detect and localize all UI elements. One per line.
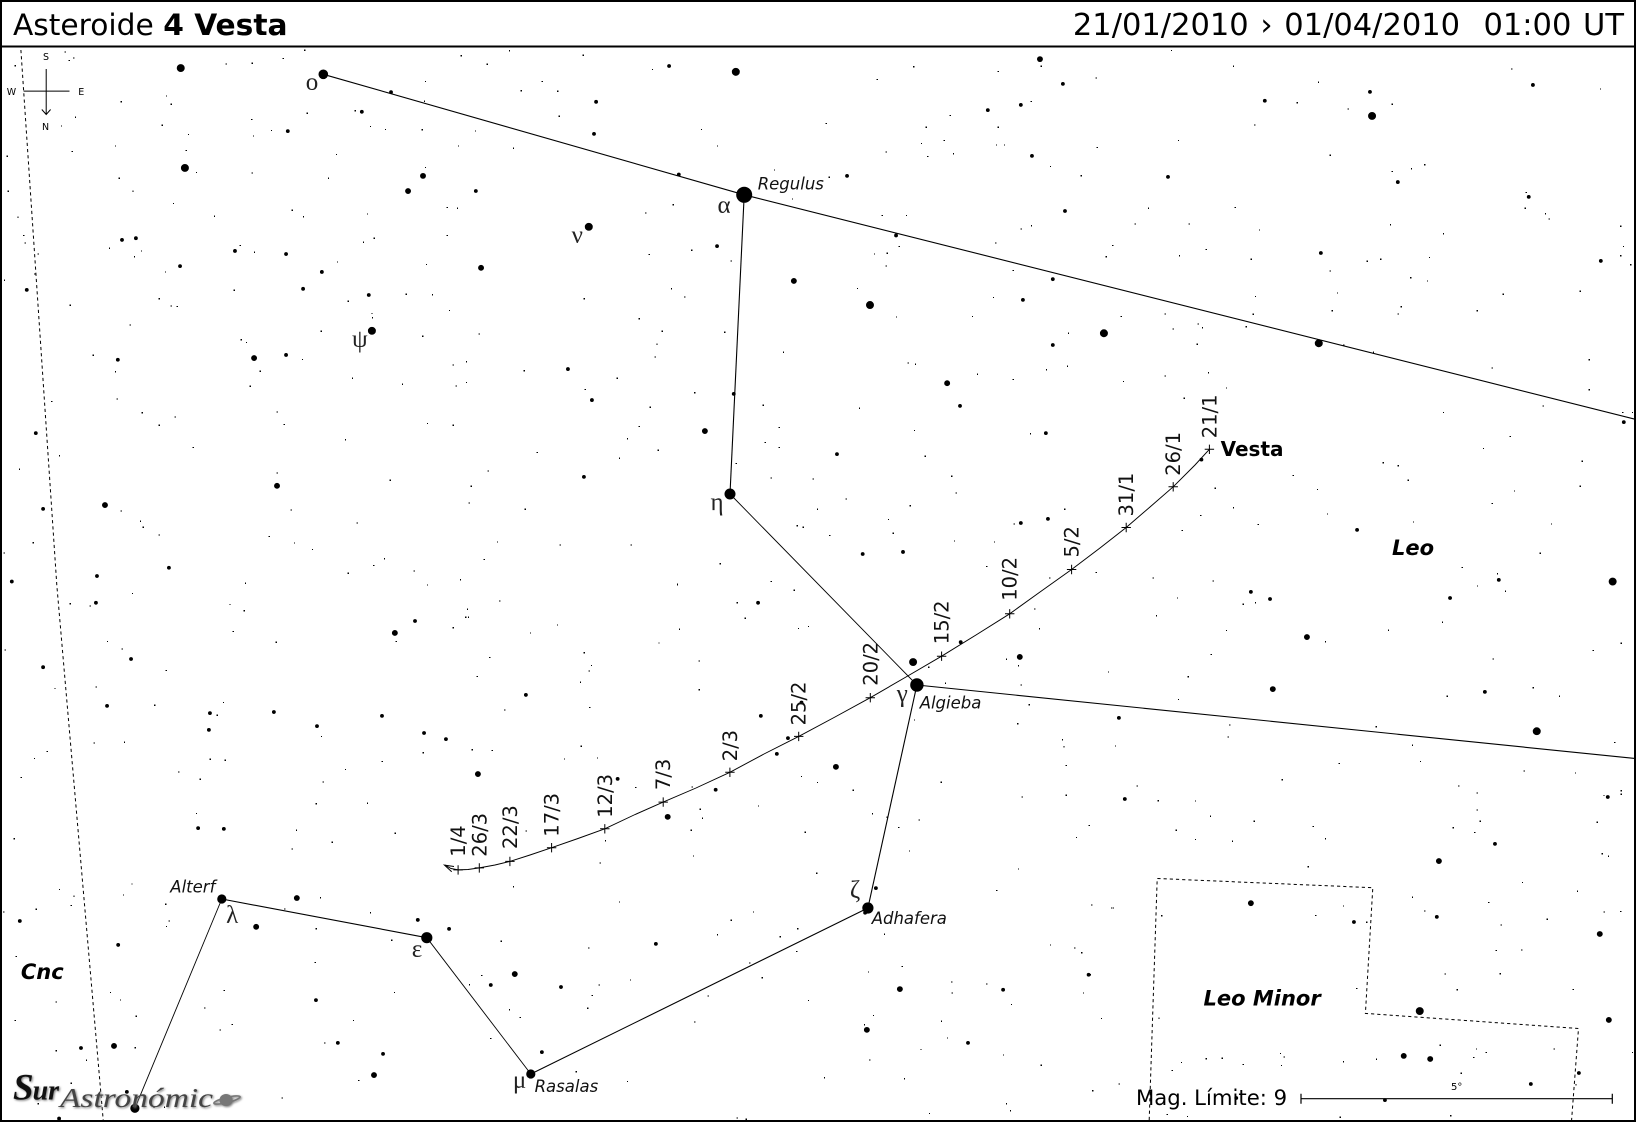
date labels: 22/3 [499, 805, 522, 849]
greek star letters: ζ [850, 877, 860, 904]
date labels: 21/1 [1198, 395, 1221, 438]
date labels: 7/3 [652, 759, 675, 790]
arrow head [444, 865, 454, 872]
date labels: 17/3 [541, 793, 564, 837]
compass: S [43, 52, 49, 63]
constellation names: Cnc [21, 960, 64, 984]
greek star letters: μ [513, 1067, 526, 1094]
stars: upper right [1096, 51, 1633, 582]
star names [169, 175, 981, 1096]
stars: lower right [1090, 586, 1633, 1117]
date labels [447, 395, 1221, 857]
compass: E [78, 87, 84, 98]
stars: upper left [4, 50, 542, 583]
greek star letters [226, 69, 908, 1094]
greek star letters: η [710, 489, 724, 516]
date ticks [453, 445, 1214, 875]
compass: W [7, 87, 17, 98]
limiting magnitude: Mag. Límite: 9 [1136, 1085, 1287, 1110]
title: Asteroide 4 Vesta [13, 8, 288, 43]
constellation names [21, 536, 1434, 1011]
compass [7, 52, 84, 133]
constellation names: Leo [1392, 536, 1434, 560]
star names: Regulus [758, 175, 824, 194]
date labels: 5/2 [1061, 526, 1084, 558]
greek star letters: ν [572, 222, 583, 249]
stars: lower centre [558, 585, 1089, 1119]
logo: SurAstronomico: Astronómic [58, 1083, 213, 1113]
Vesta label: Vesta [1221, 437, 1284, 461]
scale bar: 5° [1451, 1082, 1462, 1093]
date labels: 26/1 [1162, 432, 1185, 476]
star names: Alterf [169, 878, 218, 896]
star names: Adhafera [871, 909, 947, 928]
scale bar [1301, 1082, 1612, 1104]
date labels: 10/2 [999, 557, 1022, 601]
date labels: 20/2 [859, 642, 882, 686]
logo: SurAstronomico: Sur [13, 1068, 60, 1108]
logo: SurAstronomico [13, 1068, 241, 1113]
date labels: 2/3 [719, 730, 742, 761]
constellation names: Leo Minor [1204, 987, 1322, 1011]
greek star letters: ε [412, 936, 422, 963]
constellation boundary: Leo Minor [1149, 878, 1578, 1120]
greek star letters: α [717, 192, 731, 219]
Vesta path [444, 395, 1221, 875]
date labels: 31/1 [1115, 473, 1138, 516]
stars: upper centre [558, 55, 1081, 584]
date labels: 26/3 [468, 813, 491, 857]
stars: lower left [4, 585, 542, 1119]
named bright stars [130, 70, 924, 1113]
date labels: 25/2 [788, 682, 811, 725]
date labels: 15/2 [931, 600, 954, 644]
greek star letters: ο [306, 69, 318, 96]
greek star letters: γ [896, 680, 908, 707]
date labels: 12/3 [594, 774, 617, 818]
star names: Rasalas [535, 1077, 599, 1096]
compass: N [42, 122, 49, 133]
greek star letters: ψ [352, 326, 368, 353]
date labels: 1/4 [447, 825, 470, 857]
constellation boundary: Cnc / Leo [21, 50, 103, 1120]
greek star letters: λ [226, 902, 238, 929]
date range: 21/01/2010 › 01/04/2010 01:00 UT [1073, 8, 1624, 43]
star names: Algieba [919, 693, 981, 712]
header bar [0, 2, 1636, 48]
